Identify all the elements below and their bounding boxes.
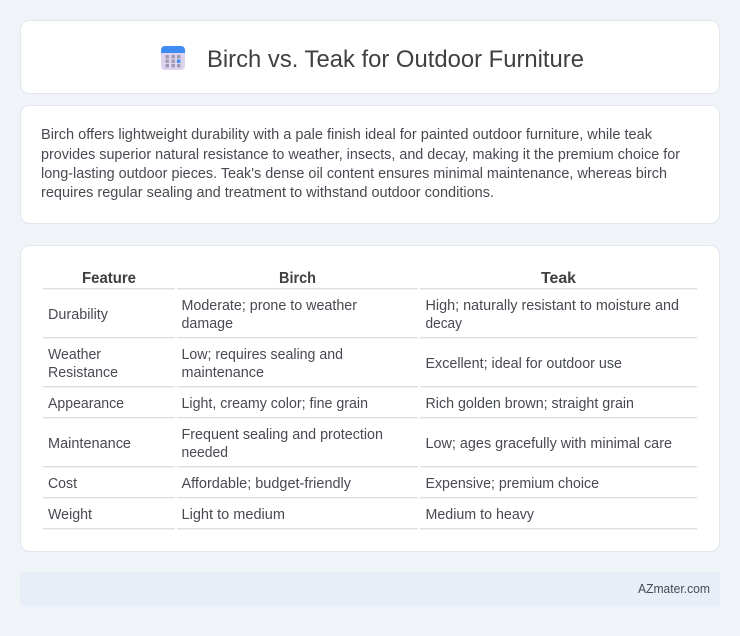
row: weather resistance: Low; requires sealing and [182,347,343,363]
row: cost: Affordable; budget-friendly [182,476,352,492]
table header [82,270,576,287]
row: appearance: Appearance [48,396,124,412]
description text: provides superior natural resistance to weather, insects, and decay, making it the premium choice for [41,147,680,163]
row: durability [48,298,679,332]
row: weight [48,507,535,523]
row: durability: Moderate; prone to weather [182,298,357,314]
row: cost: Expensive; premium choice [426,476,599,492]
description text: long-lasting outdoor pieces. Teak's dense oil content ensures minimal maintenance, whereas birch [41,166,667,182]
row: maintenance: Maintenance [48,436,131,452]
row: durability: damage [182,316,233,332]
description text: requires regular sealing and treatment to withstand outdoor conditions. [41,185,494,201]
row: weather resistance [48,347,622,381]
row: durability: Durability [48,307,109,323]
table header: Birch [279,270,316,287]
row: appearance: Rich golden brown; straight grain [426,396,634,412]
icon: calendar grid [161,46,185,70]
row: weight: Medium to heavy [426,507,535,523]
row: weather resistance: Excellent; ideal for outdoor use [426,356,622,372]
footer [20,572,720,606]
row: maintenance: needed [182,445,228,461]
footer source text: AZmater.com [638,581,710,596]
panel: comparison table [20,246,720,552]
row: weight: Weight [48,507,92,523]
row: weight: Light to medium [182,507,285,523]
table header: Teak [541,270,576,287]
row: cost: Cost [48,476,77,492]
row: appearance: Light, creamy color; fine grain [182,396,368,412]
row: appearance [48,396,634,412]
row: cost [48,476,599,492]
description text [41,127,680,201]
row: durability: High; naturally resistant to moisture and [426,298,679,314]
row: maintenance: Low; ages gracefully with minimal care [426,436,672,452]
panel: description [20,106,720,224]
row: maintenance: Frequent sealing and protection [182,427,383,443]
row: weather resistance: Resistance [48,365,118,381]
panel: title header [20,20,720,94]
row: maintenance [48,427,672,461]
row: weather resistance: maintenance [182,365,264,381]
row: weather resistance: Weather [48,347,101,363]
row: durability: decay [426,316,463,332]
table header: Feature [82,270,136,287]
title: Birch vs. Teak for Outdoor Furniture [207,46,584,73]
description text: Birch offers lightweight durability with a pale finish ideal for painted outdoor furniture, while teak [41,127,653,143]
